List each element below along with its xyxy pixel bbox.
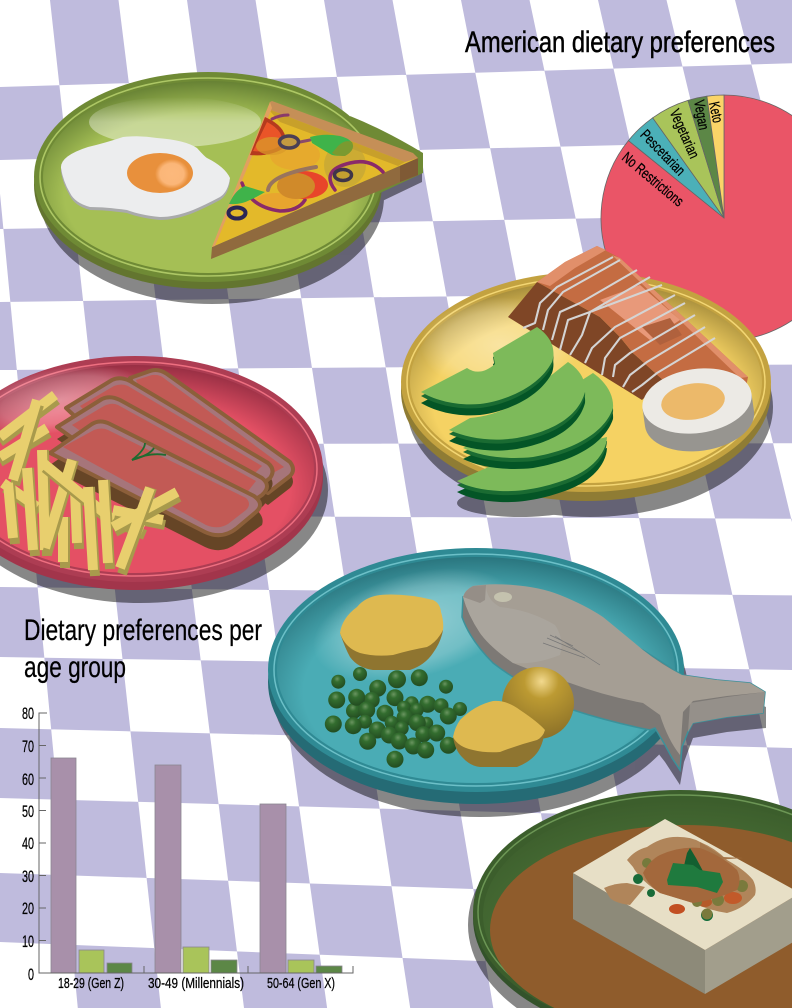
y axis labels: 50 xyxy=(22,802,34,821)
olives xyxy=(280,136,298,148)
bars: 50-64 (Gen X) xyxy=(260,804,342,973)
pizza slice xyxy=(211,101,418,259)
peas xyxy=(325,667,467,768)
tofu block xyxy=(573,819,792,994)
sauce xyxy=(627,837,756,913)
x axis labels: 50-64 (Gen X) xyxy=(267,975,335,992)
hard boiled egg xyxy=(638,362,758,458)
bars: 18-29 (Gen Z) xyxy=(51,758,132,973)
heading: Dietary preferences per age group xyxy=(24,614,262,684)
y axis labels: 0 xyxy=(28,965,34,984)
heading: Dietary preferences per age group: Dietary preferences per xyxy=(24,614,262,647)
plate: yellow with salmon, avocado and egg xyxy=(401,246,773,517)
fish xyxy=(462,584,765,770)
plate: dark green with tofu in sauce xyxy=(468,790,792,1008)
steak slice 2 xyxy=(57,397,267,522)
plate: teal with fish, potatoes and peas xyxy=(268,548,766,817)
y axis labels: 70 xyxy=(22,737,34,756)
golden ball xyxy=(502,667,574,739)
slice: Vegetarian xyxy=(653,100,724,218)
plate body xyxy=(473,790,792,1008)
plate body xyxy=(0,354,323,590)
y axis labels: 10 xyxy=(22,932,34,951)
soup xyxy=(490,825,792,1008)
herb leaves xyxy=(683,848,704,878)
salmon fat lines xyxy=(523,257,715,392)
label: No Restrictions: No Restrictions xyxy=(618,149,687,210)
plate body xyxy=(268,548,684,804)
plate shadow xyxy=(40,90,422,304)
label: Vegetarian: Vegetarian xyxy=(666,107,702,161)
plate body xyxy=(401,272,771,501)
potato top left xyxy=(340,595,443,670)
x axis labels: 30-49 (Millennials) xyxy=(148,975,244,992)
pie chart: American dietary preferences xyxy=(601,95,792,341)
x axis labels: 18-29 (Gen Z) xyxy=(58,975,124,992)
bars: 30-49 (Millennials) xyxy=(155,765,237,973)
avocado slice 2 xyxy=(449,362,585,451)
steak slice 3 xyxy=(66,378,273,502)
slice: Vegan xyxy=(688,96,724,218)
y axis labels: 80 xyxy=(22,704,34,723)
y axis labels: 20 xyxy=(22,899,34,918)
steak slice 1 xyxy=(50,422,263,550)
potato bottom xyxy=(453,701,545,767)
rosemary sprig xyxy=(132,443,166,460)
plate: red with steak and fries xyxy=(0,354,328,603)
pie labels xyxy=(618,99,726,210)
darker sauce xyxy=(643,848,740,903)
tofu toppings xyxy=(604,837,756,921)
label: Pescetarian: Pescetarian xyxy=(637,126,688,179)
plate shadow xyxy=(272,563,766,817)
bar chart: dietary preferences per age group xyxy=(22,704,353,992)
plate shadow xyxy=(468,795,792,1008)
fish side xyxy=(462,597,765,770)
avocado slice 3 xyxy=(463,373,613,469)
y axis labels xyxy=(22,704,34,984)
label: Vegan: Vegan xyxy=(690,99,712,131)
vegetables xyxy=(669,904,685,914)
y axis labels: 30 xyxy=(22,867,34,886)
avocado slices xyxy=(421,327,613,502)
steak slices xyxy=(50,370,293,550)
fried egg xyxy=(61,136,230,220)
avocado slice 1 xyxy=(421,327,553,415)
slice: Pescetarian xyxy=(628,118,724,218)
heading: Dietary preferences per age group: age group xyxy=(24,651,126,684)
french fries xyxy=(0,395,179,576)
label: Keto: Keto xyxy=(705,100,726,124)
slice: Keto xyxy=(707,95,724,218)
y axis labels: 60 xyxy=(22,770,34,789)
steak slice 4 xyxy=(130,370,293,505)
plate: green with egg and pizza xyxy=(34,72,423,304)
avocado slice 4 xyxy=(457,437,607,502)
second tomato xyxy=(278,171,328,199)
fish eye xyxy=(494,592,512,602)
plate body xyxy=(34,72,423,289)
slice: No Restrictions xyxy=(601,95,792,341)
plate shadow xyxy=(0,377,328,603)
salmon fillet xyxy=(508,246,748,400)
fish fin xyxy=(543,635,600,665)
plate shadow xyxy=(407,297,773,517)
fish top xyxy=(463,584,765,755)
axes xyxy=(39,713,353,973)
x axis labels xyxy=(58,975,335,992)
y axis labels: 40 xyxy=(22,834,34,853)
yolk xyxy=(127,153,193,193)
tomato xyxy=(250,117,286,155)
peppers xyxy=(310,135,352,156)
onion rings xyxy=(242,115,383,211)
